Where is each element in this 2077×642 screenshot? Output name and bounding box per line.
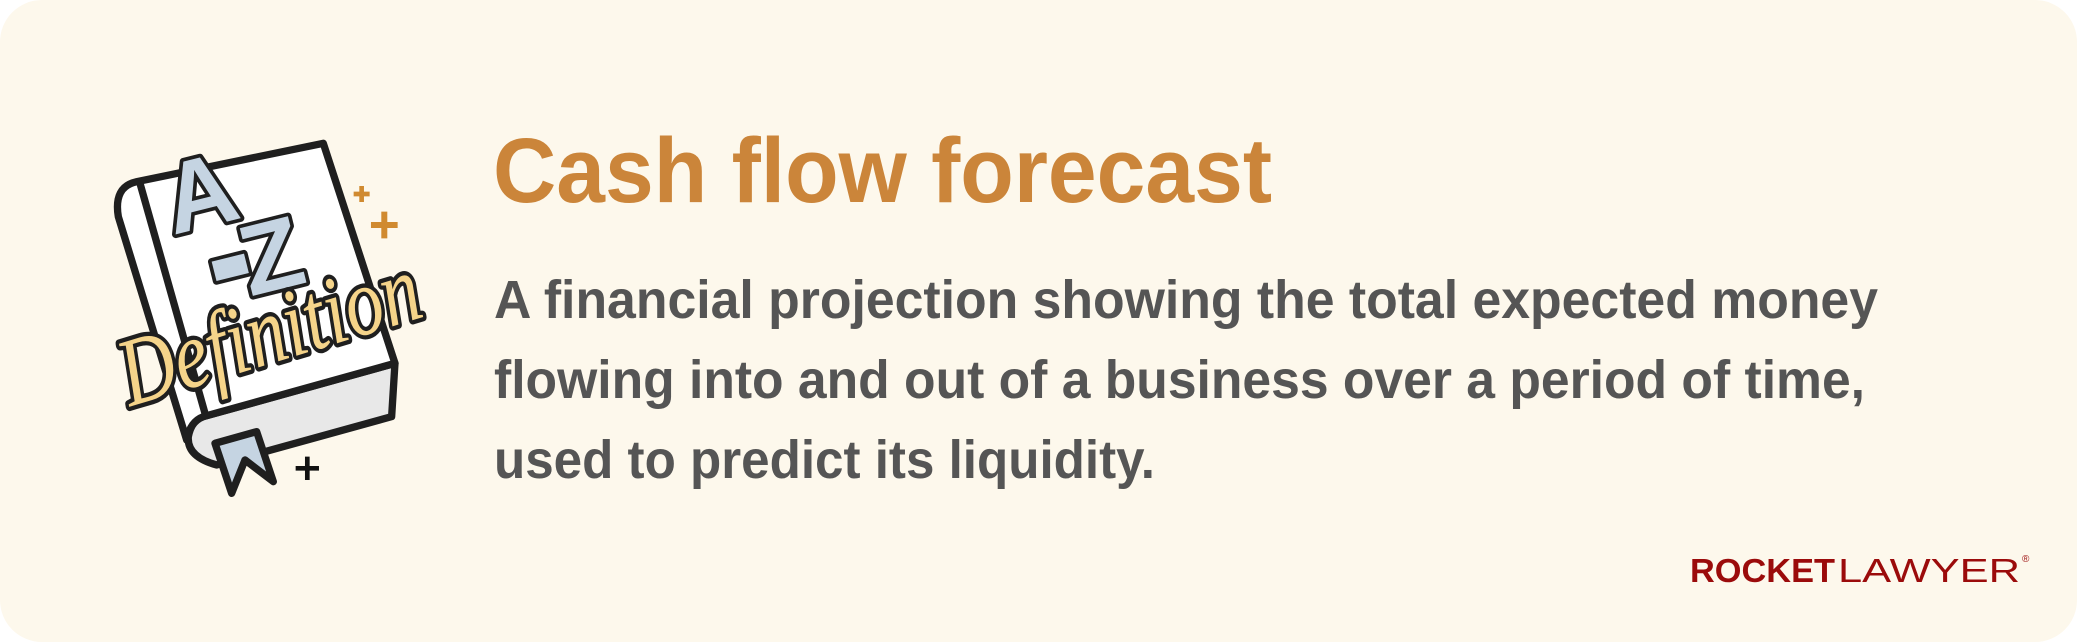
logo: Rocket Lawyer: LAWYER [1838,552,2020,589]
logo: Rocket Lawyer: ROCKET [1690,552,1835,589]
script word Definition: Definition [103,234,433,427]
letters A-Z: A [152,130,249,256]
definition text: flowing into and out of a business over a period of time, [494,350,1865,410]
title: Cash flow forecast [493,120,1272,222]
book pages block [188,363,395,465]
logo: Rocket Lawyer: ® [2022,554,2030,565]
definition text: used to predict its liquidity. [494,430,1155,490]
definition text [494,270,1878,490]
icon: definition book [103,130,433,493]
definition text: A financial projection showing the total expected money [494,270,1878,330]
logo: Rocket Lawyer [1690,552,2030,589]
letters A-Z: Z [228,195,315,318]
book cover [117,143,395,440]
letters A-Z [152,130,315,318]
bookmark [215,432,273,493]
sparkles [296,186,398,480]
